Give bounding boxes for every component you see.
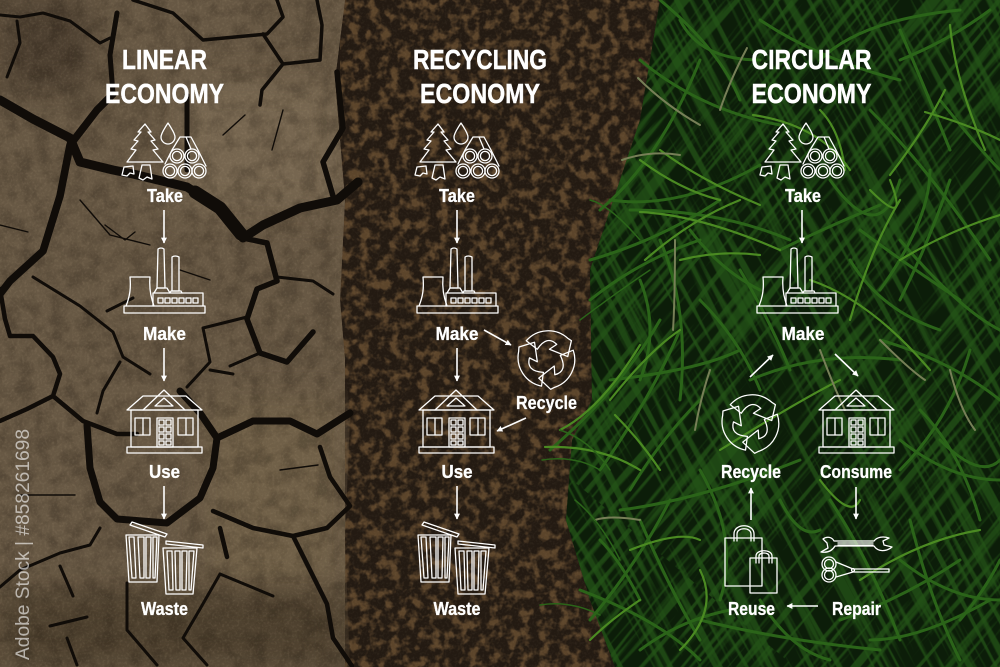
label: waste: Waste: [141, 598, 188, 619]
heading: recycling economy: RECYCLING: [413, 44, 547, 75]
icon: factory: [124, 248, 205, 313]
icon: recycle: [714, 395, 786, 458]
heading: linear economy: [105, 44, 224, 109]
arrow: make to consume: [835, 354, 858, 376]
icon: recycle: [510, 331, 582, 394]
label: make: Make: [782, 323, 824, 344]
label: use: Use: [149, 461, 180, 482]
heading: linear economy: LINEAR: [122, 44, 207, 75]
icon: trash cans: [126, 522, 203, 594]
icon: take resources: [415, 123, 499, 180]
heading: linear economy: ECONOMY: [105, 78, 224, 109]
panel: linear economy: [105, 44, 224, 619]
arrow: use to waste: [456, 486, 458, 519]
arrow: take to make: [163, 210, 165, 243]
label: take: Take: [439, 185, 475, 206]
icon: factory: [757, 248, 838, 313]
heading: circular economy: ECONOMY: [752, 78, 872, 109]
icon: factory: [417, 248, 498, 313]
heading: circular economy: [752, 44, 872, 109]
arrow: take to make: [456, 210, 458, 243]
icon: take resources: [122, 123, 206, 180]
arrow: make to recycle: [484, 330, 511, 345]
arrow: repair to reuse: [787, 605, 818, 607]
arrow: reuse to recycle: [750, 488, 752, 520]
watermark: Adobe Stock | #858261698: [13, 429, 34, 660]
label: reuse: Reuse: [728, 598, 775, 619]
panel: circular economy: [714, 44, 894, 619]
icon: house: [819, 390, 894, 453]
label: use: Use: [442, 461, 472, 482]
arrow: take to make: [801, 210, 803, 243]
label: repair: Repair: [832, 598, 881, 619]
icon: house: [419, 390, 494, 453]
label: consume: Consume: [820, 461, 892, 482]
icon: repair tools: [821, 537, 892, 582]
arrow: recycle to house: [497, 418, 526, 431]
label: recycle: Recycle: [516, 392, 577, 413]
heading: recycling economy: ECONOMY: [420, 78, 540, 109]
arrow: use to waste: [163, 486, 165, 519]
label: make: Make: [143, 323, 186, 344]
label: take: Take: [147, 185, 183, 206]
heading: circular economy: CIRCULAR: [752, 44, 872, 75]
heading: recycling economy: [413, 44, 547, 109]
panel: recycling economy: [413, 44, 582, 619]
label: recycle: Recycle: [721, 461, 781, 482]
label: waste: Waste: [434, 598, 480, 619]
arrow: make to use: [456, 348, 458, 381]
arrow: consume to repair: [855, 487, 857, 519]
label: take: Take: [785, 185, 821, 206]
icon: shopping bags: [725, 526, 777, 593]
icon: take resources: [760, 123, 844, 180]
label: make: Make: [436, 323, 478, 344]
icon: house: [127, 390, 202, 453]
arrow: recycle to make: [750, 355, 773, 377]
icon: trash cans: [418, 522, 495, 594]
arrow: make to use: [163, 348, 165, 381]
